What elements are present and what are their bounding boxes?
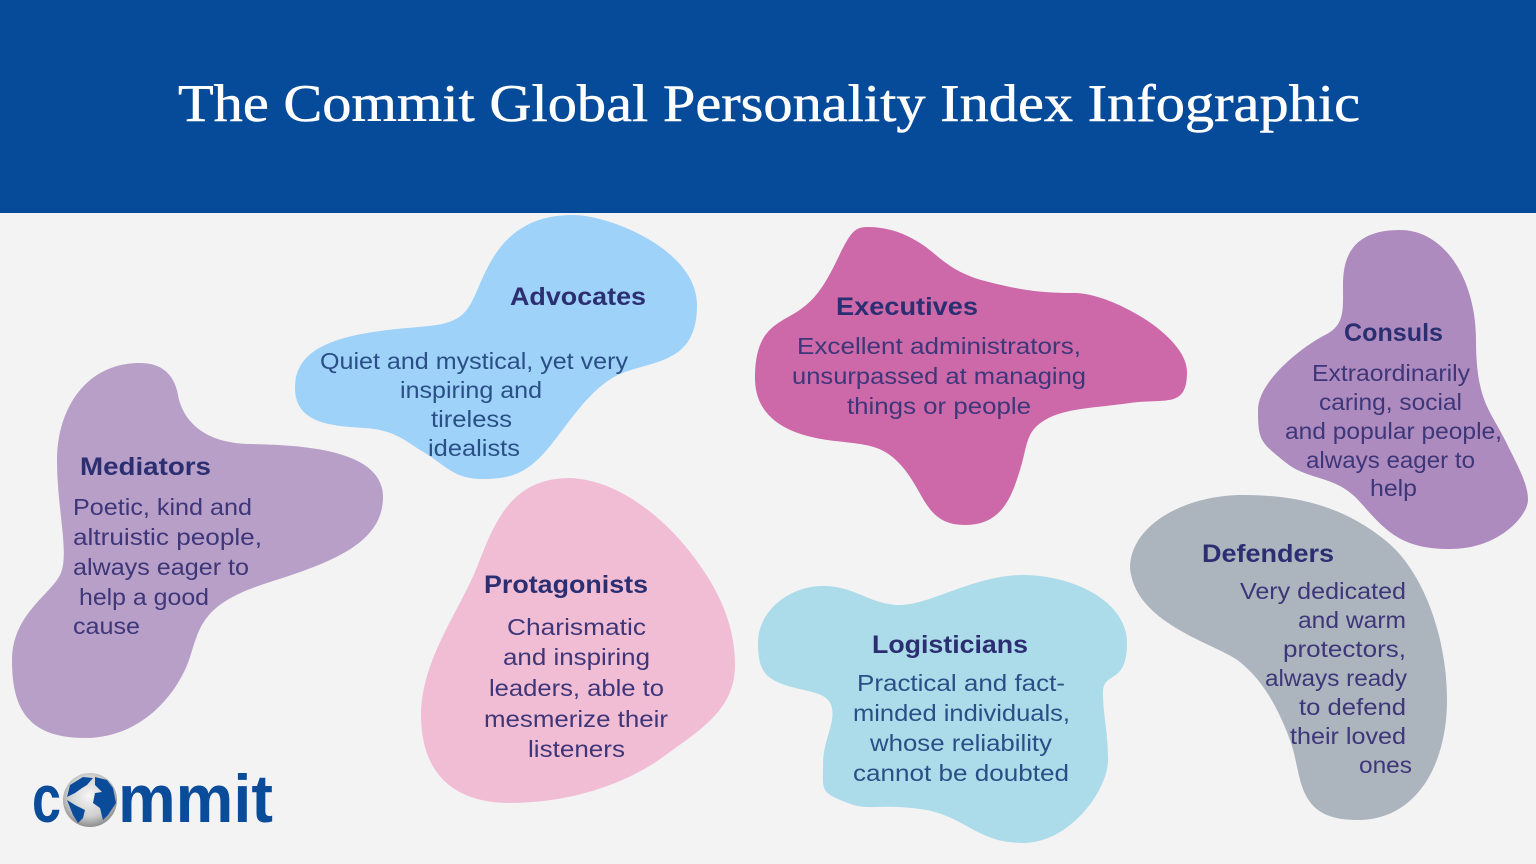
panel: protagonists [421,478,735,803]
heading: protagonists: Protagonists [484,571,648,599]
text: advocates description: tireless [431,406,512,432]
text: logisticians description: Practical and fact- [857,670,1065,696]
text: defenders description [1240,578,1412,778]
text: consuls description: caring, social [1319,389,1462,415]
panel: executives [755,227,1187,525]
panel: defenders [1130,495,1447,820]
logo: commit [32,761,273,837]
blob: consuls [1258,230,1528,549]
text: mediators description: Poetic, kind and [73,494,252,520]
text: protagonists description: listeners [528,736,625,762]
text: logisticians description: cannot be doubted [853,760,1069,786]
text: mediators description: always eager to [73,554,249,580]
text: executives description [792,333,1086,419]
blob: mediators [12,363,383,738]
text: consuls description: help [1370,475,1417,501]
text: mediators description [73,494,262,639]
text: defenders description: to defend [1299,694,1406,720]
heading: advocates: Advocates [510,283,646,311]
text: defenders description: always ready [1265,665,1408,691]
panel: consuls [1258,230,1528,549]
text: consuls description: Extraordinarily [1312,360,1471,386]
blob: defenders [1130,495,1447,820]
text: defenders description: and warm [1298,607,1406,633]
text: defenders description: their loved [1290,723,1406,749]
text: logisticians description: whose reliability [869,730,1053,756]
blob: advocates [295,215,697,479]
blob: protagonists [421,478,735,803]
text: logisticians description: minded individuals, [853,700,1070,726]
icon: globe [63,773,117,827]
text: executives description: unsurpassed at managing [792,363,1086,389]
text: protagonists description: Charismatic [507,614,646,640]
text: consuls description: and popular people, [1285,418,1502,444]
heading: mediators: Mediators [80,453,211,481]
text: advocates description: inspiring and [400,377,542,403]
text: defenders description: Very dedicated [1240,578,1406,604]
text: defenders description: protectors, [1283,636,1406,662]
text: defenders description: ones [1359,752,1412,778]
text: protagonists description [484,614,668,762]
text: mediators description: altruistic people, [73,524,262,550]
logo text: c: c [32,761,61,837]
text: advocates description: idealists [428,435,520,461]
text: protagonists description: mesmerize their [484,706,668,732]
text: logisticians description [853,670,1070,786]
heading: consuls: Consuls [1344,319,1443,347]
text: consuls description [1285,360,1502,501]
text: advocates description: Quiet and mystical, yet very [320,348,629,374]
text: advocates description [320,348,629,461]
header band [0,0,1536,213]
panel: advocates [295,215,697,479]
text: protagonists description: and inspiring [503,644,650,670]
heading: logisticians: Logisticians [872,631,1028,659]
text: executives description: Excellent administrators, [797,333,1081,359]
heading: defenders: Defenders [1202,540,1334,568]
logo text: mmit: mmit [118,761,273,837]
text: mediators description: help a good [79,584,209,610]
heading: executives: Executives [836,293,978,321]
blob: logisticians [758,575,1127,843]
text: mediators description: cause [73,613,140,639]
text: executives description: things or people [847,393,1031,419]
text: consuls description: always eager to [1306,447,1475,473]
panel: mediators [12,363,383,738]
panel: logisticians [758,575,1127,843]
title: The Commit Global Personality Index Infographic [178,75,1360,133]
text: protagonists description: leaders, able to [489,675,664,701]
blob: executives [755,227,1187,525]
